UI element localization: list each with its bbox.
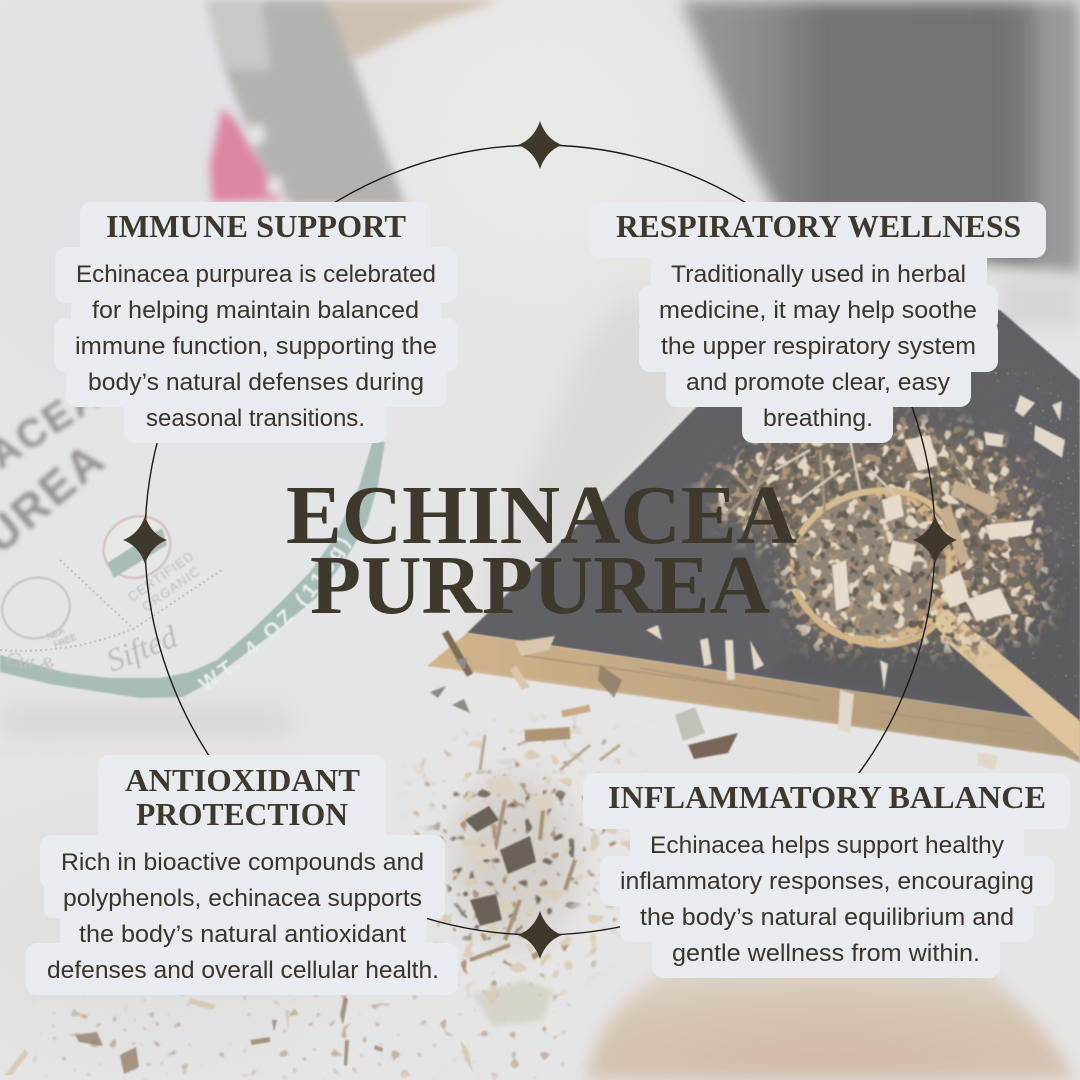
jar	[0, 372, 386, 738]
white table edge	[427, 666, 1080, 778]
bottom-left chip scatter	[40, 992, 570, 1075]
heading background and body line backgrounds	[583, 773, 1070, 978]
herb pile on the board	[646, 395, 1080, 770]
body text: Echinacea helps support healthy	[650, 832, 1004, 859]
top-right dark vessel	[680, 0, 1080, 328]
body text: Traditionally used in herbal	[671, 261, 966, 288]
star: top	[518, 121, 562, 169]
green label band	[0, 440, 385, 698]
circle connector ring	[145, 145, 935, 935]
star: bottom	[518, 911, 562, 959]
certified organic label text: ORGANIC	[139, 563, 203, 614]
certified organic label text: NEA	[45, 626, 66, 642]
panel: antioxidant protection	[26, 755, 458, 995]
dark board	[467, 300, 1080, 725]
blurred brand lettering	[0, 372, 115, 563]
panel: inflammatory balance	[583, 773, 1070, 978]
certified organic label text	[4, 548, 203, 678]
heading background and body line backgrounds	[54, 202, 458, 443]
body text: polyphenols, echinacea supports	[63, 885, 422, 912]
heading background and body line backgrounds	[590, 202, 1046, 443]
star: right	[913, 516, 957, 564]
soft herb scatter base	[453, 775, 577, 945]
heading background and body line backgrounds	[26, 755, 458, 995]
spoon handle	[928, 605, 1080, 758]
body text: breathing.	[763, 405, 873, 432]
herb chip texture	[700, 415, 1048, 652]
body text: the body’s natural antioxidant	[79, 921, 406, 948]
certified organic label text: Cut &	[4, 648, 57, 677]
heading: ANTIOXIDANT	[125, 762, 360, 798]
blurred knife, pink and wood in the top-left	[205, 0, 500, 205]
body text	[620, 832, 1034, 967]
spoon bowl	[790, 489, 958, 645]
body text: defenses and overall cellular health.	[47, 957, 439, 984]
body text: for helping maintain balanced	[92, 297, 419, 324]
body text: the upper respiratory system	[661, 333, 976, 360]
scattered herbs on the table	[5, 632, 738, 1075]
body text	[75, 261, 437, 432]
body text: Echinacea purpurea is celebrated	[76, 261, 436, 288]
body text: medicine, it may help soothe	[659, 297, 977, 324]
body text	[659, 261, 977, 432]
heading: PROTECTION	[136, 796, 348, 832]
body text: seasonal transitions.	[146, 405, 365, 432]
main title: ECHINACEA	[286, 469, 797, 562]
heading: IMMUNE SUPPORT	[106, 208, 406, 244]
certified organic label text: FREE	[52, 632, 78, 650]
dotted lines on label	[0, 560, 222, 651]
panel: immune support	[54, 202, 458, 443]
body text: body’s natural defenses during	[88, 369, 424, 396]
spoon rim redrawn over chips	[800, 490, 955, 535]
body text: Rich in bioactive compounds and	[61, 849, 424, 876]
star: left	[123, 516, 167, 564]
main title: PURPUREA	[310, 539, 770, 632]
panel: respiratory wellness	[590, 202, 1046, 443]
body text: inflammatory responses, encouraging	[620, 868, 1034, 895]
body text	[47, 849, 439, 984]
certified organic label text: CERTIFIED	[125, 548, 197, 604]
wood strip	[427, 633, 1080, 763]
tan cup at the bottom	[586, 962, 1075, 1080]
soft wall and table tones	[0, 0, 700, 1060]
heading: RESPIRATORY WELLNESS	[616, 208, 1021, 244]
heading: INFLAMMATORY BALANCE	[608, 779, 1046, 815]
heading	[125, 762, 360, 832]
organic seal	[94, 505, 180, 589]
herb scatter texture	[417, 725, 643, 1005]
sticks and chips	[646, 395, 1065, 770]
small round seal	[0, 570, 77, 646]
main title	[286, 469, 797, 632]
certified organic label text: Sifted	[101, 617, 183, 678]
jar: WT. 4 OZ (113g)	[196, 537, 352, 689]
body text: gentle wellness from within.	[672, 940, 980, 967]
body text: and promote clear, easy	[686, 369, 950, 396]
board speckle	[960, 340, 1080, 710]
body text: the body’s natural equilibrium and	[640, 904, 1014, 931]
body text: immune function, supporting the	[75, 333, 437, 360]
